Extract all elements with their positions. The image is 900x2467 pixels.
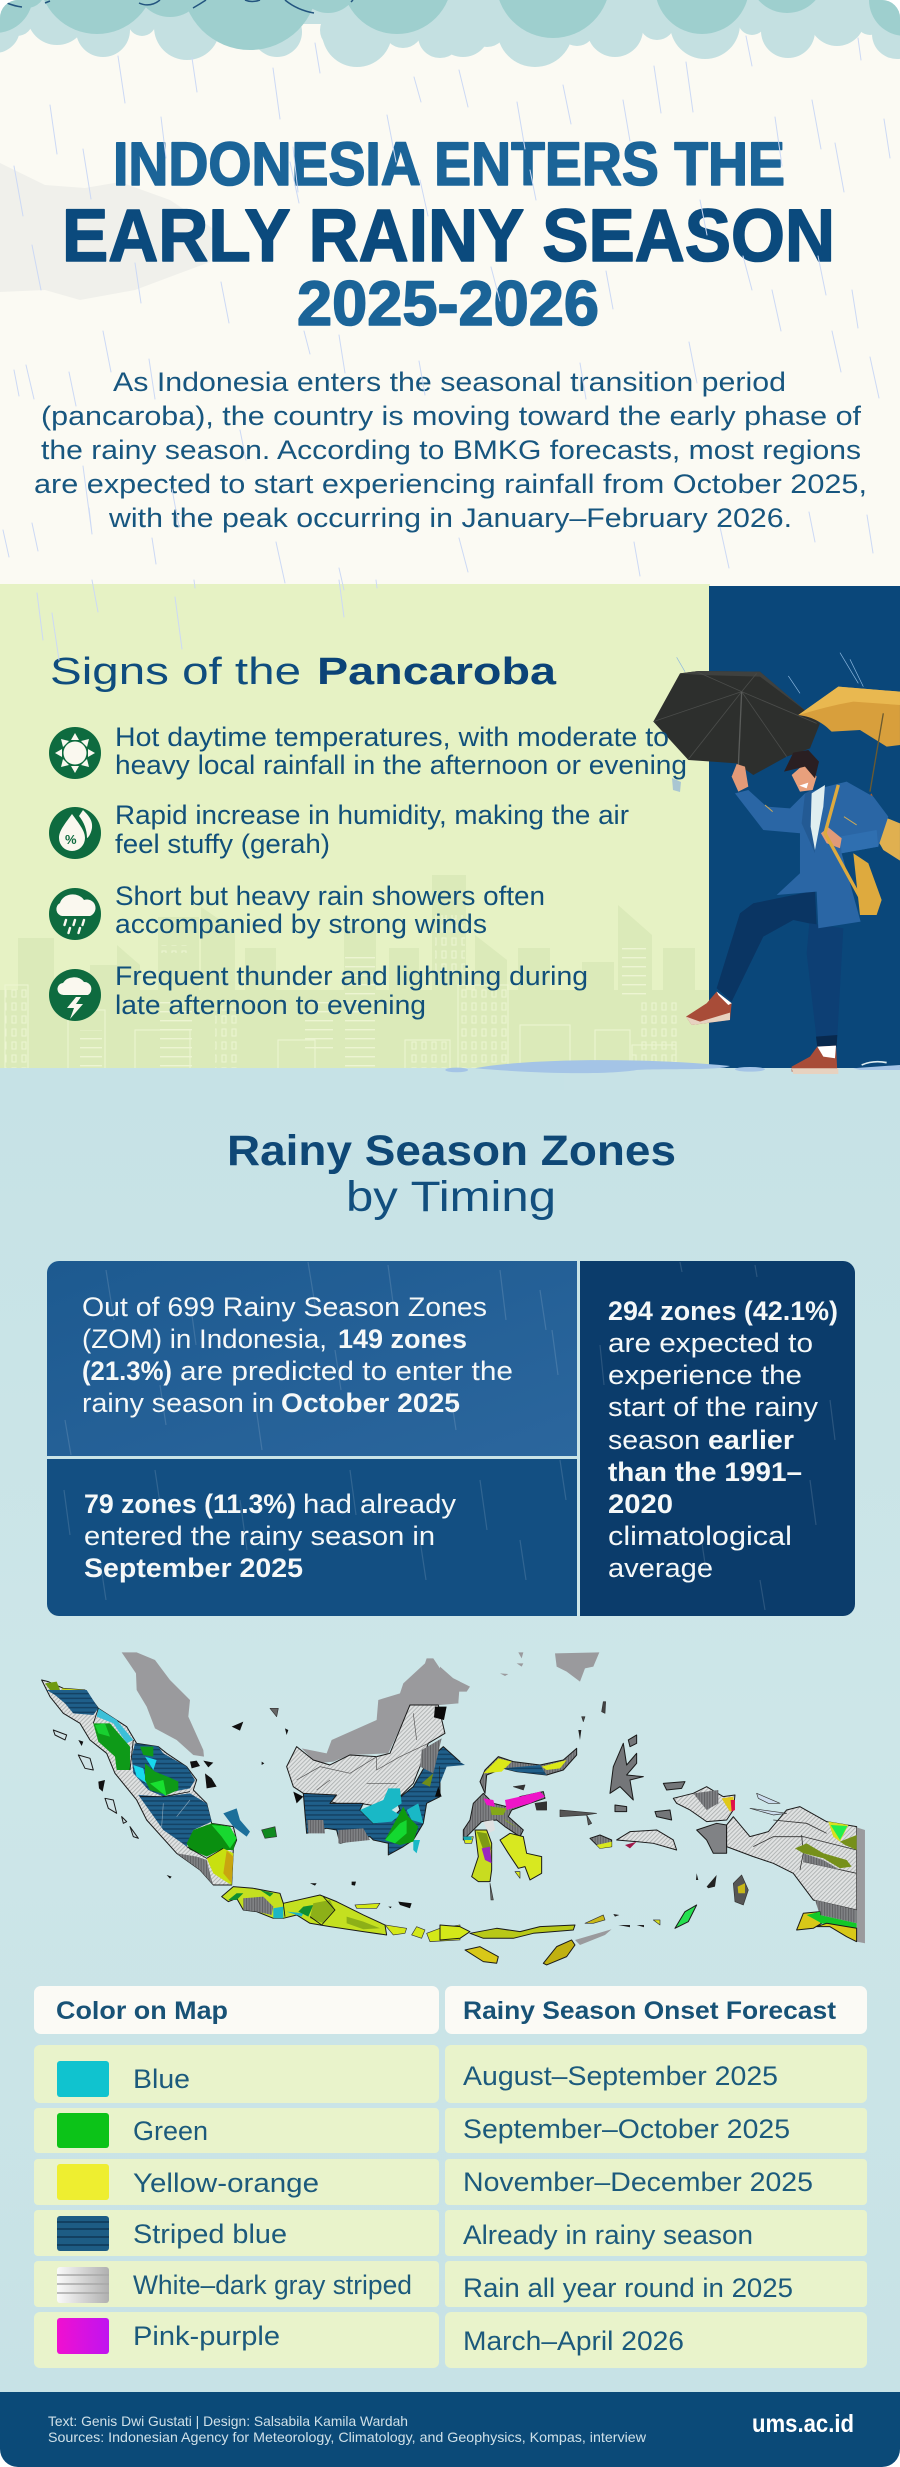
- map of indonesia: [42, 1652, 865, 1965]
- sign 1: hot days: [49, 722, 687, 780]
- text: earlier than average: season: [608, 1425, 700, 1455]
- footer credits: Text: Genis Dwi Gustati | Design: Salsabila Kamila Wardah: [48, 2413, 408, 2429]
- sign 4: thunder and lightning: Frequent thunder and lightning during: [115, 961, 588, 991]
- row: striped blue: [57, 2216, 753, 2251]
- panel: header background: [0, 0, 900, 590]
- text: october zones: 149 zones: [338, 1324, 467, 1354]
- text: october zones: [82, 1292, 513, 1418]
- icon: yellow umbrella: [798, 687, 900, 861]
- text: october zones: rainy season in: [82, 1388, 274, 1418]
- text: october zones: (ZOM) in Indonesia,: [82, 1324, 327, 1354]
- water drop on the text edge: [672, 778, 681, 792]
- nusa tenggara: [440, 1905, 697, 1965]
- heading: signs of the pancaroba: Signs of the: [50, 651, 301, 693]
- small java sea islands: [310, 1882, 412, 1908]
- panel: signs of the pancaroba background: [0, 584, 710, 990]
- heading: signs of the pancaroba: [52, 656, 556, 692]
- title: EARLY RAINY SEASON: [62, 194, 835, 277]
- text: september zones: had already: [303, 1489, 457, 1519]
- panel: rainy season zones background: [0, 1066, 900, 2396]
- illustration: person with umbrella: [445, 653, 900, 1090]
- row: white-dark gray striped: White–dark gray striped: [133, 2270, 412, 2300]
- row: white-dark gray striped: [57, 2267, 793, 2303]
- row: yellow-orange: November–December 2025: [463, 2167, 813, 2197]
- kalimantan: [287, 1705, 460, 1855]
- gray mist cloud: [0, 163, 215, 300]
- footer credits: [48, 2413, 647, 2445]
- ground and puddles: [446, 1060, 900, 1074]
- text: earlier than average: are expected to: [608, 1328, 813, 1358]
- text: earlier than average: [608, 1296, 838, 1583]
- title: INDONESIA ENTERS THE: [113, 130, 785, 198]
- legend header: onset forecast: Rainy Season Onset Forecast: [463, 1997, 837, 2025]
- row: pink-purple: Pink-purple: [133, 2321, 280, 2351]
- row: striped blue: Already in rainy season: [463, 2220, 753, 2250]
- row: green: [57, 2113, 790, 2148]
- city skyline: [0, 875, 710, 1068]
- rain over the header: [3, 36, 890, 660]
- person: shirt: [811, 785, 825, 850]
- text: september zones: 79 zones (11.3%): [84, 1489, 296, 1519]
- rain splashes: [677, 653, 863, 693]
- text: earlier than average: than the 1991–: [608, 1457, 802, 1487]
- legend header: onset forecast: [445, 1986, 867, 2034]
- philippines: [500, 1652, 599, 1682]
- papua: [673, 1787, 865, 1943]
- sign 4: thunder and lightning: late afternoon to evening: [115, 990, 426, 1020]
- text: september zones: entered the rainy season in: [84, 1521, 435, 1551]
- legend header: colour on map: Color on Map: [56, 1997, 228, 2025]
- row: striped blue: Striped blue: [133, 2219, 287, 2249]
- row: blue: [57, 2061, 778, 2097]
- text: october zones: October 2025: [281, 1388, 460, 1418]
- text: earlier than average: climatological: [608, 1521, 792, 1551]
- small western islands: [53, 1708, 288, 1879]
- footer site name: ums.ac.id: [752, 2410, 854, 2438]
- sign 1: hot days: heavy local rainfall in the afternoon or evening: [115, 750, 687, 780]
- intro text block: (pancaroba), the country is moving toward the early phase of: [41, 401, 862, 431]
- heading: rainy season zones: [227, 1127, 676, 1221]
- panel: dark blue column: [709, 586, 900, 1068]
- icon: rain cloud: [49, 888, 101, 940]
- intro text block: with the peak occurring in January–February 2026.: [108, 503, 792, 533]
- maluku: [560, 1702, 717, 1888]
- sign 4: thunder and lightning: [49, 961, 588, 1021]
- row: blue: August–September 2025: [463, 2061, 778, 2091]
- legend table: [34, 1986, 867, 2368]
- row: yellow-orange: [57, 2164, 813, 2200]
- heading: rainy season zones: Rainy Season Zones: [227, 1127, 676, 1175]
- sign 2: humidity: feel stuffy (gerah): [115, 829, 330, 859]
- row: green: Green: [133, 2116, 208, 2146]
- map: western islands: [42, 1652, 460, 1942]
- text: september zones: September 2025: [84, 1553, 303, 1583]
- icon: storm cloud: [49, 969, 101, 1021]
- icon: humidity drops: %: [65, 832, 77, 847]
- sumatra: [42, 1680, 237, 1885]
- heading: signs of the pancaroba: Pancaroba: [317, 651, 557, 693]
- text: earlier than average: earlier: [708, 1425, 795, 1455]
- row: pink-purple: March–April 2026: [463, 2326, 684, 2356]
- icon: humidity drops: [49, 807, 101, 859]
- row: green: September–October 2025: [463, 2114, 790, 2144]
- person: hands: [732, 764, 842, 848]
- person: head: [784, 750, 819, 792]
- person: coat: [735, 782, 888, 928]
- text: october zones: (21.3%): [82, 1356, 172, 1386]
- legend row backgrounds: [34, 2045, 867, 2368]
- sign 3: rain showers: Short but heavy rain showers often: [115, 881, 545, 911]
- sign 1: hot days: Hot daytime temperatures, with moderate to: [115, 722, 669, 752]
- person: bag and strap: [825, 785, 882, 915]
- text: october zones: are predicted to enter the: [180, 1356, 513, 1386]
- java and bali: [222, 1887, 460, 1942]
- icon: black umbrella: [653, 671, 820, 775]
- icon: sun: [49, 727, 101, 779]
- sign 3: rain showers: [49, 881, 545, 940]
- title: 2025-2026: [297, 269, 599, 339]
- intro text block: are expected to start experiencing rainfall from October 2025,: [34, 469, 867, 499]
- sulawesi: [463, 1748, 577, 1900]
- text: earlier than average: 2020: [608, 1489, 673, 1519]
- legend header: colour on map: [34, 1986, 439, 2034]
- text: earlier than average: 294 zones (42.1%): [608, 1296, 838, 1326]
- sign 2: humidity: Rapid increase in humidity, making the air: [115, 800, 629, 830]
- text: earlier than average: average: [608, 1553, 713, 1583]
- intro text block: As Indonesia enters the seasonal transition period: [113, 367, 786, 397]
- panel: zone statistics: [47, 1261, 855, 1616]
- row: pink-purple: [57, 2318, 684, 2356]
- sign 2: humidity: [49, 800, 629, 859]
- intro text block: [34, 367, 867, 533]
- footer credits: Sources: Indonesian Agency for Meteorology, Climatology, and Geophysics, Kompas, interview: [48, 2429, 647, 2445]
- map: eastern islands: [440, 1652, 865, 1965]
- east kalimantan edge: [440, 1750, 465, 1783]
- row: yellow-orange: Yellow-orange: [133, 2168, 319, 2198]
- text: earlier than average: experience the: [608, 1360, 802, 1390]
- title: [66, 141, 832, 326]
- text: september zones: [84, 1489, 457, 1583]
- person: shoes: [686, 992, 838, 1074]
- clouds at top of page: [0, 0, 900, 67]
- footer: [0, 2392, 900, 2467]
- row: white-dark gray striped: Rain all year round in 2025: [463, 2273, 793, 2303]
- text: october zones: Out of 699 Rainy Season Zones: [82, 1292, 487, 1322]
- text: earlier than average: start of the rainy: [608, 1392, 819, 1422]
- heading: rainy season zones: by Timing: [346, 1173, 556, 1221]
- sign 3: rain showers: accompanied by strong winds: [115, 909, 487, 939]
- malaysia and north borneo: [122, 1652, 460, 1763]
- person: trousers: [717, 891, 843, 1047]
- intro text block: the rainy season. According to BMKG forecasts, most regions: [41, 435, 861, 465]
- row: blue: Blue: [133, 2064, 190, 2094]
